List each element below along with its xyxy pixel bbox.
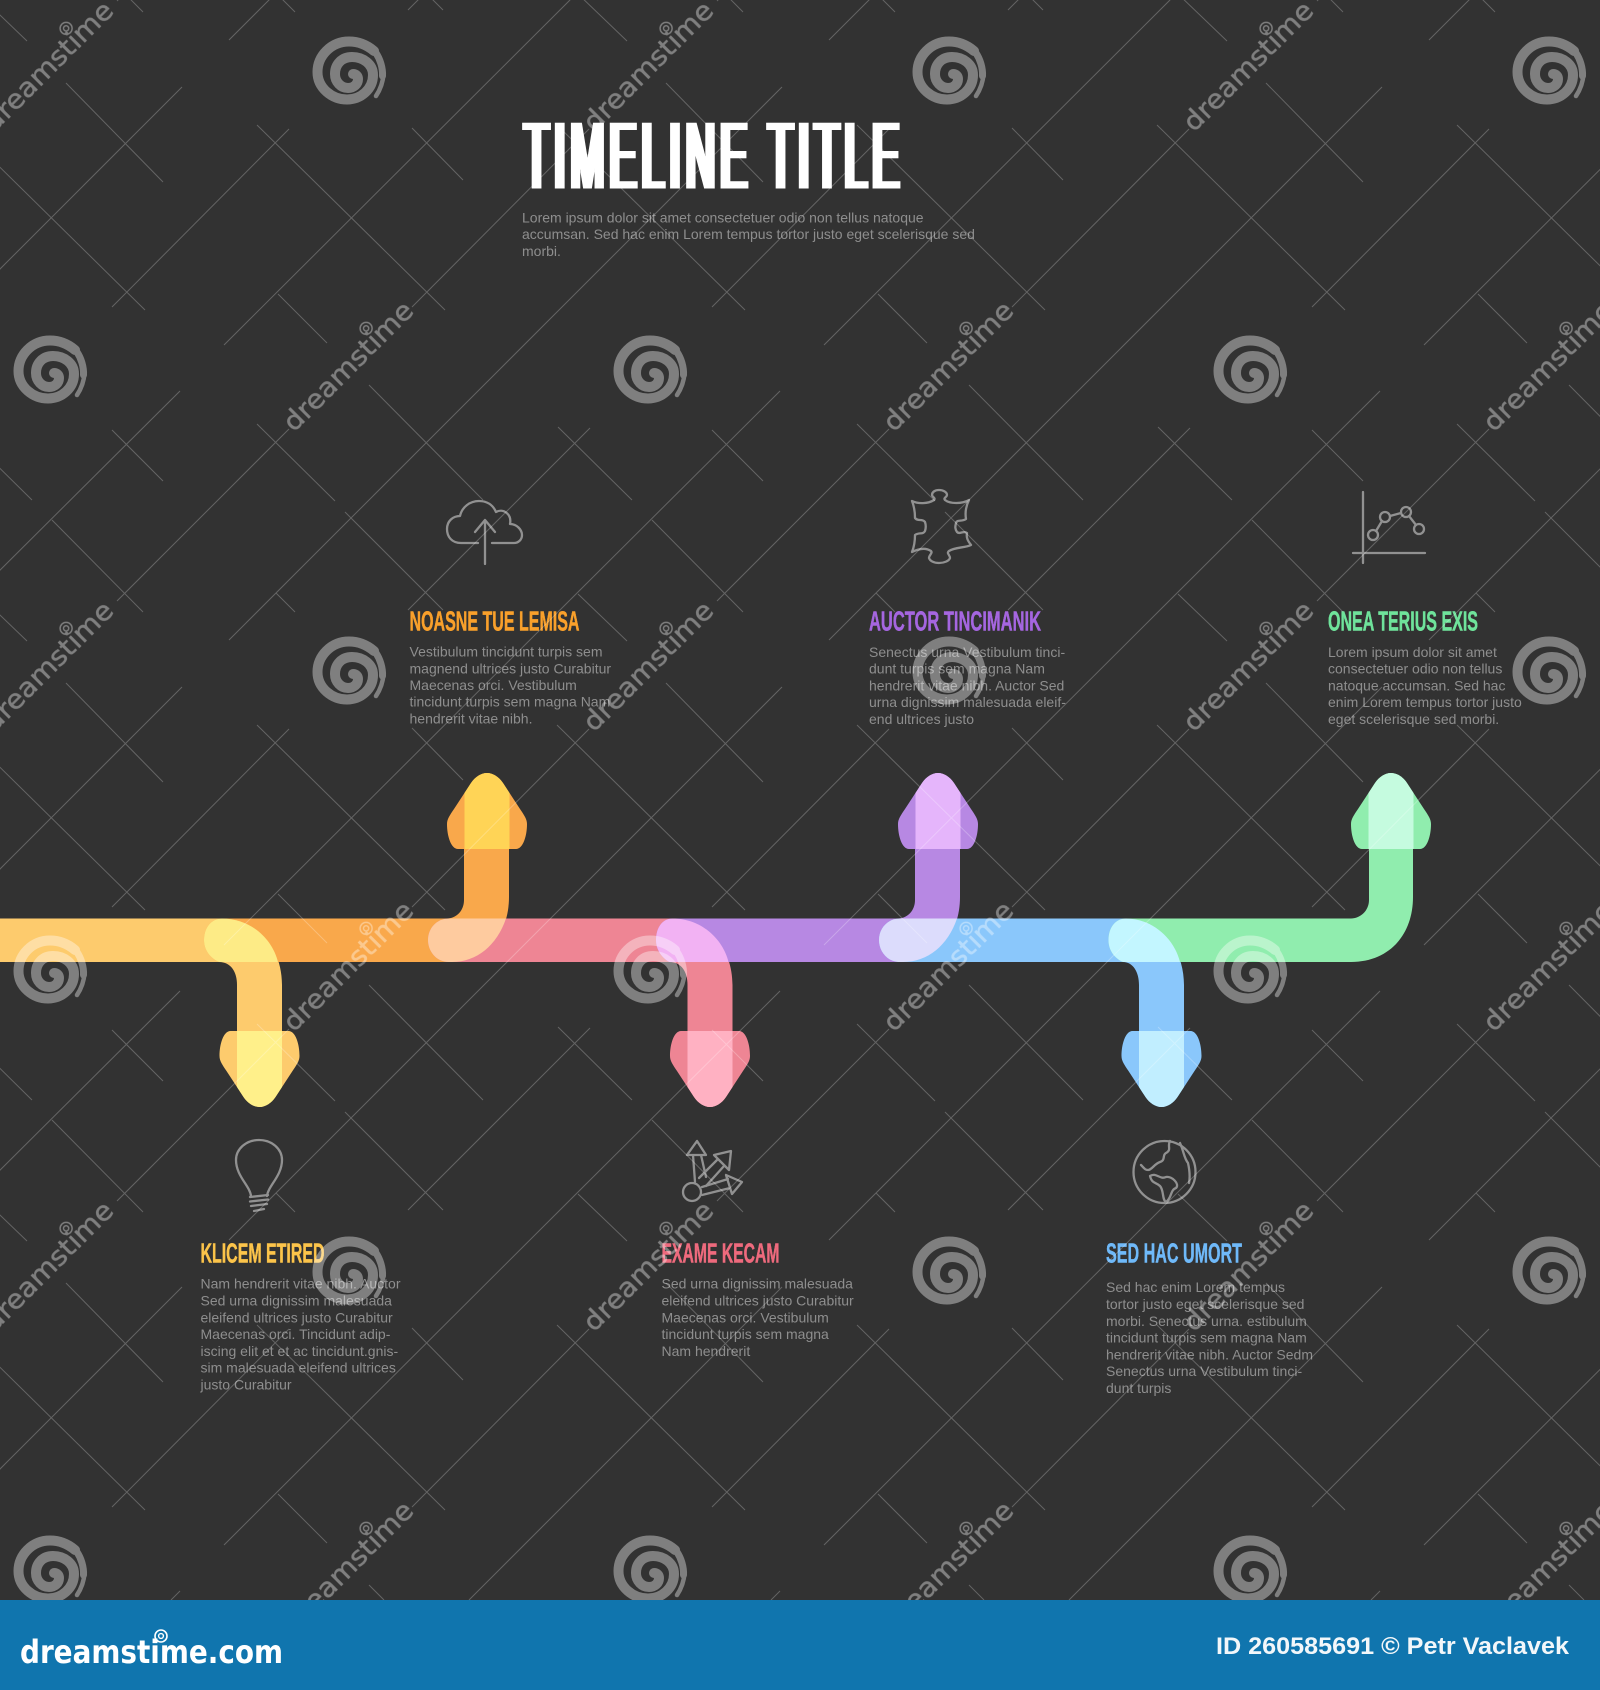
segment: pink down arrow (428, 918, 750, 1107)
body text: hendrerit vitae nibh. Auctor Sed (869, 677, 1064, 693)
body text: consectetuer odio non tellus (1328, 661, 1502, 677)
footer bar (0, 1600, 1600, 1690)
overlap: pink and purple (656, 918, 728, 962)
panel: auctor tincimanik (869, 490, 1066, 727)
intro text: morbi. (522, 243, 561, 259)
segment: blue down arrow (879, 918, 1202, 1107)
body text: tincidunt turpis sem magna (662, 1326, 829, 1342)
watermark overlay: dreamstime (277, 895, 420, 1038)
icon: light bulb (236, 1140, 282, 1211)
body text: iscing elit et et ac tincidunt.gnis- (200, 1343, 398, 1359)
body text: hendrerit vitae nibh. Auctor Sedm (1106, 1346, 1313, 1362)
body text: Sed urna dignissim malesuada (200, 1292, 392, 1308)
heading: ONEA TERIUS EXIS (1328, 606, 1478, 636)
intro text (522, 210, 975, 259)
overlap: blue and green (1108, 918, 1180, 962)
body text: hendrerit vitae nibh. (410, 710, 532, 726)
panel: klicem etired (200, 1140, 401, 1392)
body text: magnend ultrices justo Curabitur (410, 660, 611, 676)
body text: eleifend ultrices justo Curabitur (662, 1292, 854, 1308)
body text: urna dignissim malesuada eleif- (869, 694, 1066, 710)
heading: NOASNE TUE LEMISA (410, 606, 580, 636)
icon: cloud upload (447, 501, 522, 564)
body text (869, 644, 1066, 727)
body text: morbi. Senectus urna. estibulum (1106, 1313, 1307, 1329)
body text (1328, 644, 1522, 727)
body text: dunt turpis sem magna Nam (869, 661, 1045, 677)
icon: puzzle piece (912, 490, 971, 563)
watermark overlay: dreamstime (1177, 595, 1320, 738)
body text: justo Curabitur (200, 1376, 292, 1392)
watermark overlay: dreamstime (277, 295, 420, 438)
body text: tortor justo eget scelerisque sed (1106, 1296, 1304, 1312)
intro text: Lorem ipsum dolor sit amet consectetuer odio non tellus natoque (522, 210, 924, 226)
watermark overlay: dreamstime (1177, 1195, 1320, 1338)
segment: purple up arrow (656, 773, 978, 962)
heading: EXAME KECAM (662, 1238, 780, 1269)
segment: yellow down arrow (0, 918, 300, 1107)
heading: KLICEM ETIRED (200, 1238, 324, 1269)
body text: tincidunt turpis sem magna Nam (410, 694, 610, 710)
overlap: orange and pink (428, 918, 506, 962)
panel: sed hac umort (1106, 1141, 1313, 1396)
body text (200, 1276, 401, 1392)
overlap: yellow and orange (204, 918, 278, 962)
body text: eleifend ultrices justo Curabitur (200, 1309, 393, 1325)
title: TIMELINE TITLE (524, 101, 904, 210)
watermark overlay: dreamstime (577, 595, 720, 738)
body text: Vestibulum tincidunt turpis sem (410, 644, 602, 660)
body text: eget scelerisque sed morbi. (1328, 711, 1499, 727)
footer credit: ID 260585691 © Petr Vaclavek (1216, 1633, 1570, 1660)
watermark overlay: dreamstime (1177, 0, 1320, 138)
watermark overlay: dreamstime (577, 0, 720, 138)
body text (410, 644, 611, 726)
body text: enim Lorem tempus tortor justo (1328, 694, 1522, 710)
watermark overlay: dreamstime (277, 1495, 420, 1638)
panel: exame kecam (662, 1141, 854, 1359)
body text: end ultrices justo (869, 711, 974, 727)
body text: dunt turpis (1106, 1380, 1171, 1396)
watermark overlay: dreamstime (877, 295, 1020, 438)
overlap: purple and blue (879, 918, 957, 962)
intro text: accumsan. Sed hac enim Lorem tempus tortor justo eget scelerisque sed (522, 226, 975, 242)
body text: natoque accumsan. Sed hac (1328, 677, 1505, 693)
icon: diverging arrows (683, 1141, 742, 1201)
body text: Maecenas orci. Tincidunt adip- (200, 1326, 391, 1342)
timeline arrows (0, 773, 1431, 1107)
footer logo: dreamstime.com (20, 1633, 283, 1671)
body text: Maecenas orci. Vestibulum (662, 1309, 829, 1325)
body text: Sed urna dignissim malesuada (662, 1276, 853, 1292)
body text: Nam hendrerit vitae nibh. Auctor (200, 1276, 401, 1292)
watermark overlay: dreamstime (577, 1195, 720, 1338)
panel: onea terius exis (1328, 492, 1522, 727)
icon: line chart (1353, 492, 1425, 563)
body text: Nam hendrerit (662, 1343, 750, 1359)
segment: orange up arrow (204, 773, 527, 962)
body text: Maecenas orci. Vestibulum (410, 677, 577, 693)
watermark overlay: dreamstime (877, 895, 1020, 1038)
heading: SED HAC UMORT (1106, 1238, 1242, 1269)
body text: sim malesuada eleifend ultrices (200, 1360, 396, 1376)
body text: tincidunt turpis sem magna Nam (1106, 1330, 1307, 1346)
body text: Senectus urna Vestibulum tinci- (1106, 1363, 1302, 1379)
segment: green up arrow (1108, 773, 1431, 962)
body text: Senectus urna Vestibulum tinci- (869, 644, 1065, 660)
body text (662, 1276, 854, 1359)
icon: globe (1134, 1141, 1196, 1203)
body text (1106, 1279, 1313, 1396)
body text: Lorem ipsum dolor sit amet (1328, 644, 1497, 660)
heading: AUCTOR TINCIMANIK (869, 606, 1041, 636)
body text: Sed hac enim Lorem tempus (1106, 1279, 1285, 1295)
panel: noasne tue lemisa (410, 501, 611, 726)
watermark overlay: dreamstime (877, 1495, 1020, 1638)
